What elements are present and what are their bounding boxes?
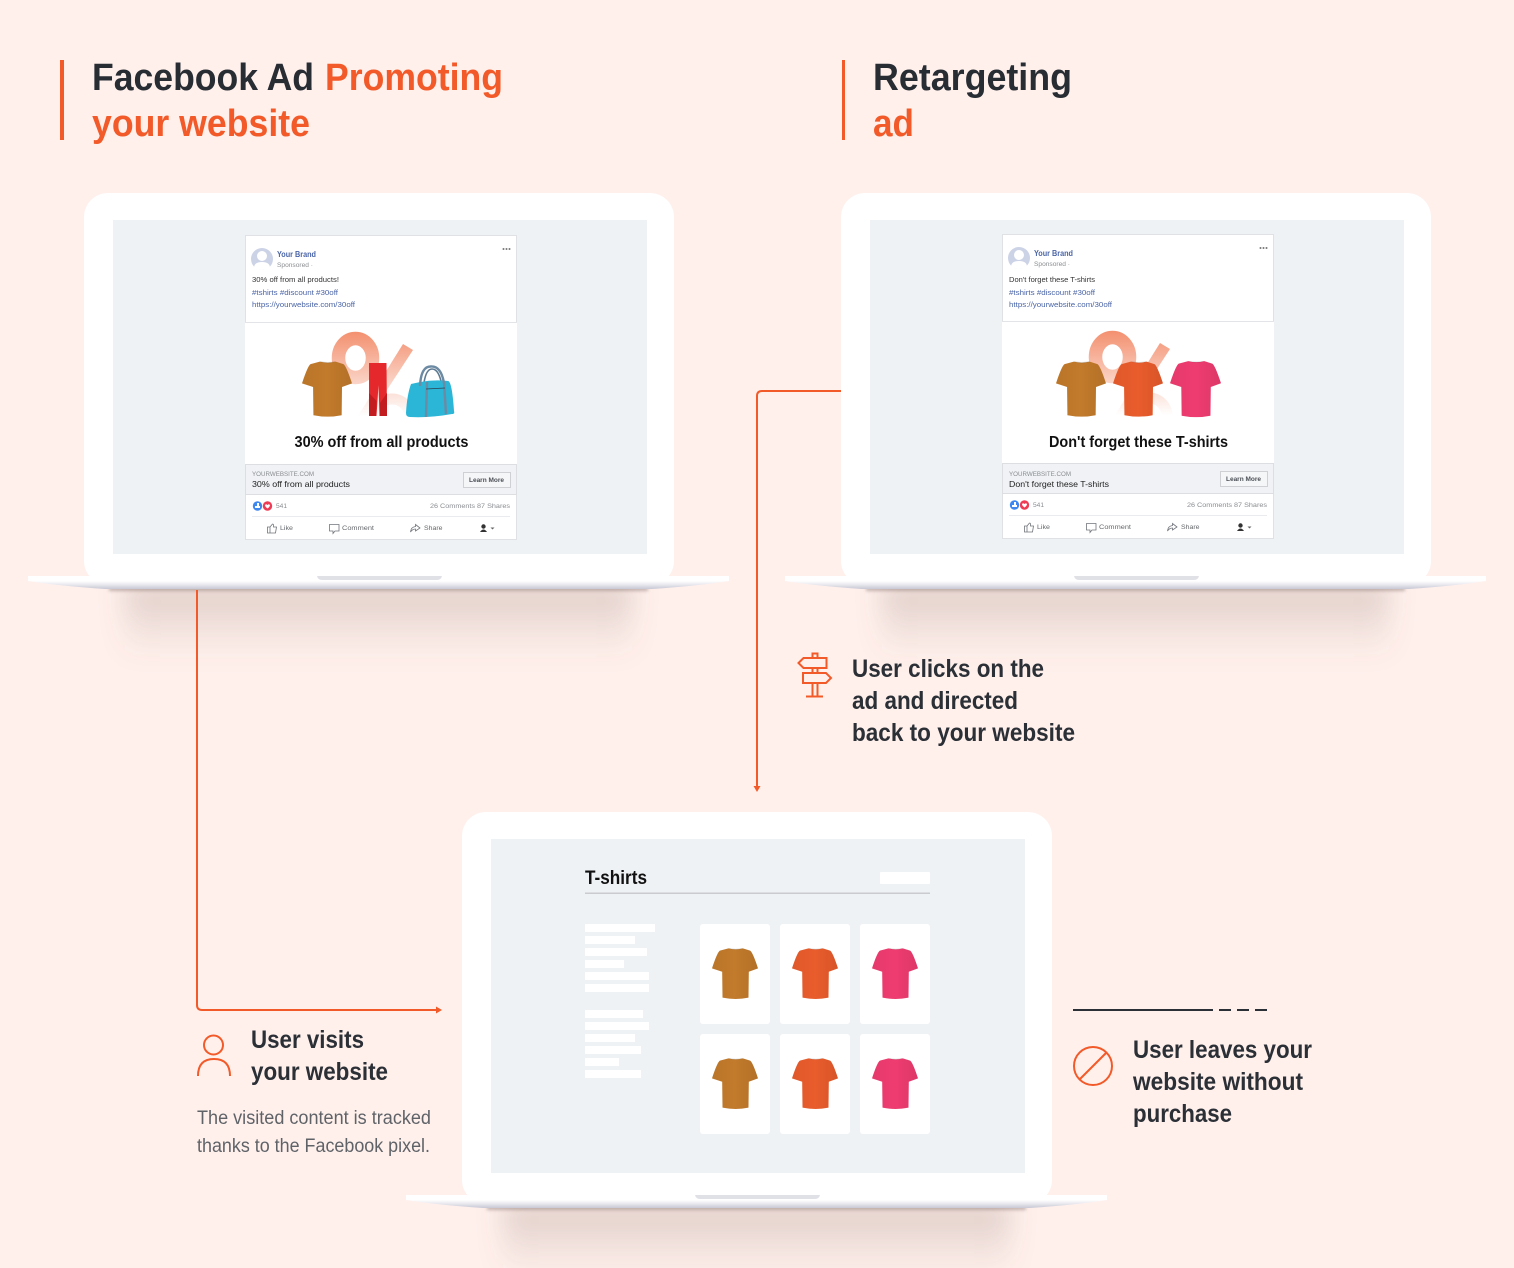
link bar: YOURWEBSITE.COM [1009,471,1071,478]
icon: user [198,1036,230,1076]
reactions row: 26 Comments 87 Shares [1187,502,1268,509]
product: brown t-shirt [1056,361,1106,417]
arrow: Facebook ad to website [197,590,442,1014]
link bar: 30% off from all products [252,479,350,489]
link bar: Don't forget these T-shirts [1009,479,1109,489]
text: user clicks: User clicks on the [852,655,1044,683]
product: pink t-shirt [1170,361,1221,417]
icon: more dots [1260,247,1268,249]
heading: Facebook ad: Facebook Ad [92,57,314,99]
reactions row: 541 [276,503,287,510]
product card: brown second row [700,1034,770,1134]
post text: Don't forget these T-shirts [1009,277,1096,284]
text: user visits: User visits [251,1026,364,1054]
learn more button: Learn More [469,477,504,484]
text: pixel tracking note: thanks to the Facebook pixel. [197,1136,430,1157]
ad headline: 30% off from all products [294,434,468,451]
action bar: Comment [342,525,374,532]
action bar [268,524,494,534]
page title: T-shirts [585,868,647,889]
panel: Facebook ad card [245,236,517,540]
post text: #tshirts #discount #30off [1009,290,1095,297]
text: user visits: your website [251,1058,388,1086]
percent watermark [1096,338,1187,437]
post text: 30% off from all products! [252,277,339,284]
text: user clicks: back to your website [852,719,1075,747]
text: user leaves [1132,1036,1312,1128]
laptop: website [406,812,1107,1268]
action bar: Share [1181,524,1200,531]
text: user visits [251,1026,388,1086]
action bar: Like [1037,524,1050,531]
reactions row [1010,500,1268,510]
product card: pink [860,924,930,1024]
text: user leaves: User leaves your [1133,1036,1312,1064]
sort control [880,872,930,884]
text: pixel tracking note: The visited content is tracked [197,1108,431,1129]
product: red pants [369,363,387,416]
panel: website product listing [585,868,930,1134]
action bar: Comment [1099,524,1131,531]
text: user clicks [852,655,1075,747]
link bar [246,464,516,494]
product card: orange [780,924,850,1024]
post text: https://yourwebsite.com/30off [1009,302,1112,309]
product card: pink second row [860,1034,930,1134]
link bar [1002,464,1274,494]
post text: #tshirts #discount #30off [252,290,338,297]
product: orange t-shirt [1113,361,1163,417]
product card: orange second row [780,1034,850,1134]
icon: profile avatar [1008,247,1030,269]
brand name: Your Brand [1034,249,1073,258]
learn more button [1220,472,1268,486]
product card: brown [700,924,770,1024]
learn more button: Learn More [1226,476,1261,483]
action bar [1024,523,1252,532]
panel: retargeting ad card [1002,234,1274,538]
text: user clicks: ad and directed [852,687,1018,715]
heading: Facebook ad [60,57,503,145]
action bar: Share [424,525,443,532]
fading exit line [1073,1009,1267,1011]
heading: Retargeting ad: ad [873,103,914,145]
icon: signpost [798,654,831,696]
heading: Retargeting ad [842,57,1072,145]
text: user leaves: website without [1132,1068,1304,1096]
icon: prohibited [1074,1047,1112,1085]
heading: Facebook ad: Promoting [325,57,503,99]
post text [252,277,355,309]
link bar: YOURWEBSITE.COM [252,471,314,478]
text: pixel tracking note [197,1108,431,1157]
action bar: Like [280,525,293,532]
post text [1009,277,1112,309]
reactions row [253,501,511,511]
post text: https://yourwebsite.com/30off [252,302,355,309]
reactions row: 26 Comments 87 Shares [430,503,511,510]
sidebar filters [585,924,655,1078]
reactions row: 541 [1033,502,1044,509]
percent watermark [338,338,430,438]
sponsored label: Sponsored · [277,262,313,269]
learn more button [464,472,510,488]
arrow: retargeting ad to website [754,391,841,792]
product: blue bag [406,366,454,417]
ad headline: Don't forget these T-shirts [1049,434,1228,451]
text: user leaves: purchase [1133,1100,1232,1128]
product: brown t-shirt [302,361,352,417]
laptop: Facebook ad [28,193,729,657]
brand name: Your Brand [277,250,316,259]
laptop: retargeting ad [785,193,1486,657]
sponsored label: Sponsored · [1034,261,1070,268]
heading: Retargeting ad: Retargeting [873,57,1072,99]
icon: profile avatar [251,248,273,270]
icon: more dots [502,248,510,250]
heading: Facebook ad: your website [92,103,310,145]
